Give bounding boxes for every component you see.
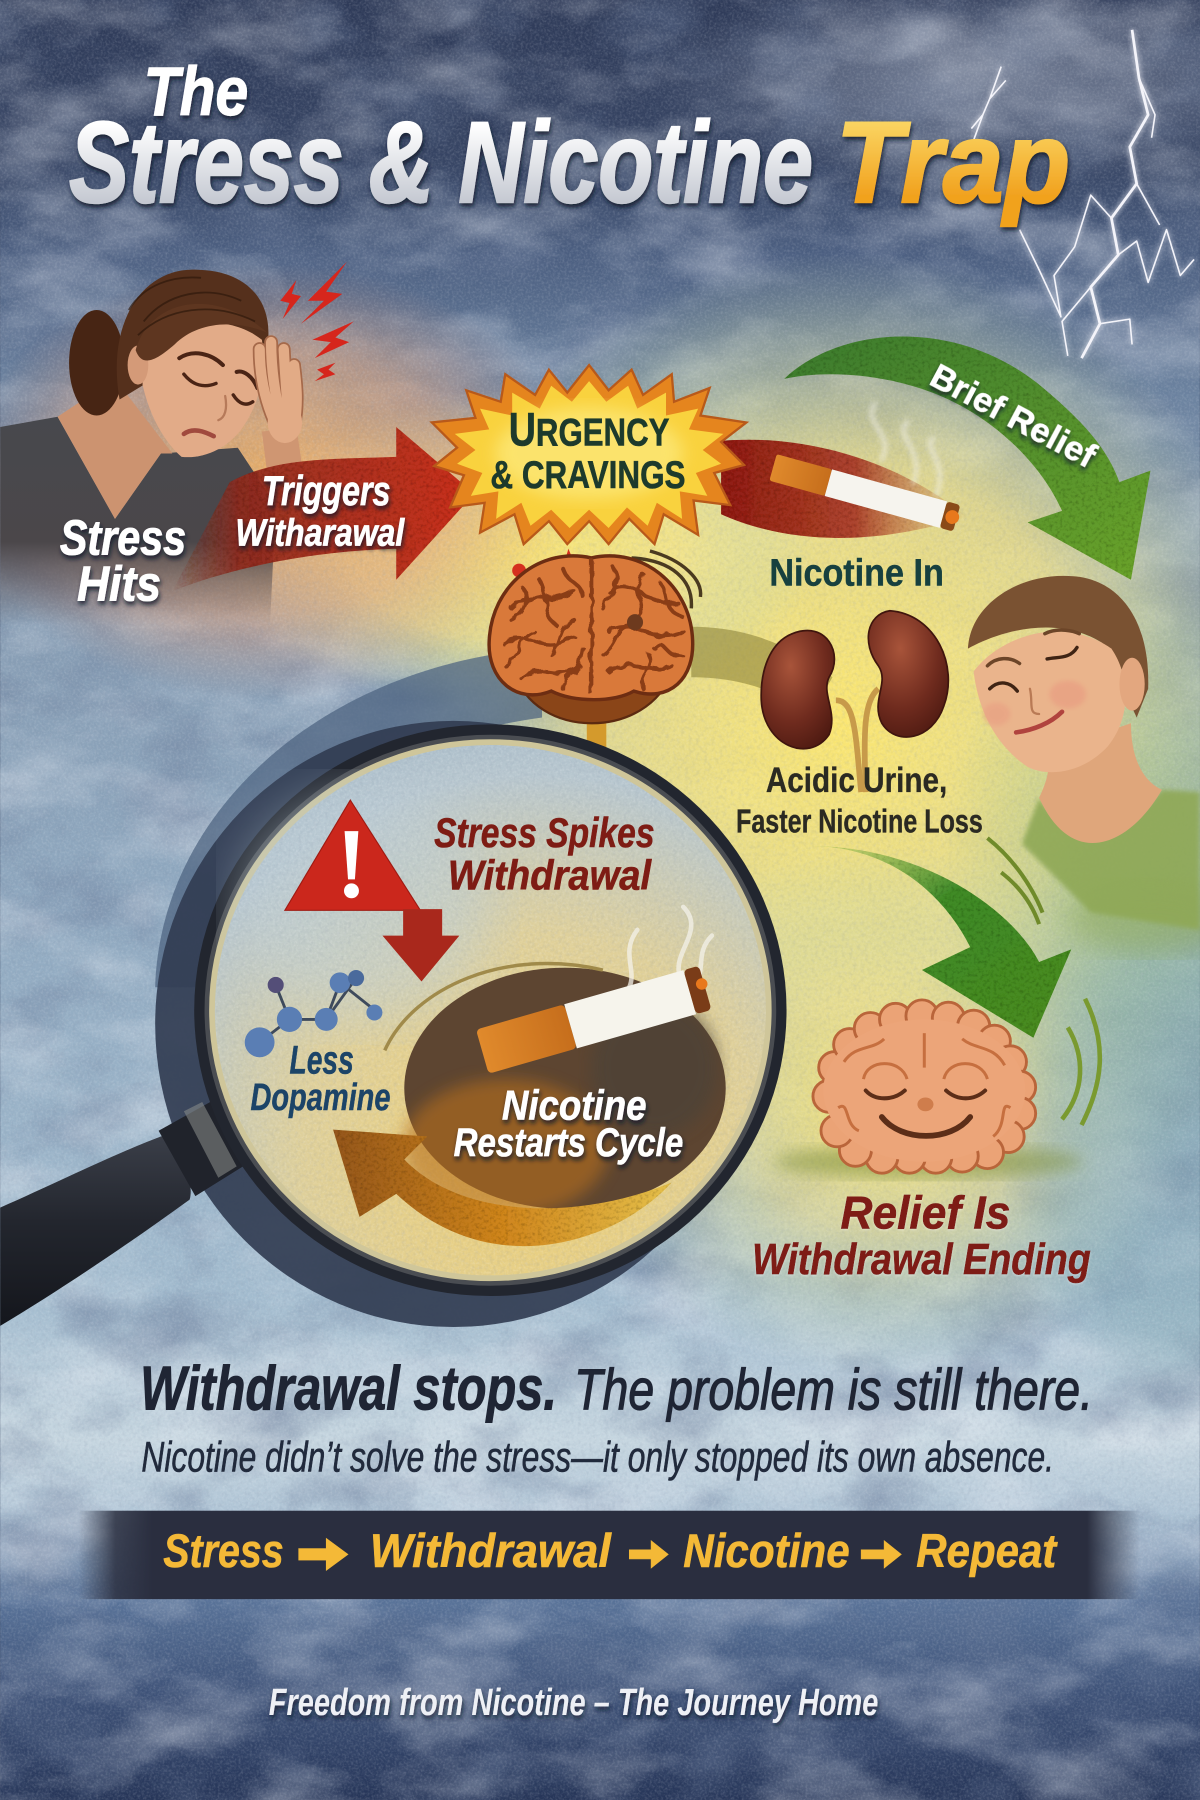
urgency text: URGENCY [509, 402, 669, 455]
face [866, 1091, 985, 1136]
cycle word: Repeat: Repeat [916, 1524, 1058, 1577]
cycle arrow 2 [629, 1541, 668, 1568]
dark spot [627, 614, 643, 630]
lens: dopamine molecule [245, 970, 382, 1057]
cerebellum [514, 672, 672, 723]
brain stem [587, 717, 606, 752]
lens: warning triangle [285, 800, 420, 910]
face [143, 323, 263, 457]
lens: nicotine restarts cycle text: Nicotine [502, 1082, 646, 1128]
label: Triggers Withdrawal [236, 468, 406, 554]
lens: less dopamine text: Dopamine [250, 1077, 390, 1119]
shirt [1022, 790, 1200, 930]
folds [838, 1033, 1010, 1136]
icon: cigarette with smoke [769, 404, 963, 532]
title line: The: The [144, 53, 248, 130]
lens: stress spikes withdrawal text: Withdrawal [448, 853, 652, 899]
lens: nicotine restarts cycle text [454, 1082, 683, 1165]
red droplets [512, 549, 576, 577]
callout: urgency and cravings starburst [432, 365, 746, 544]
cycle word: Nicotine: Nicotine [683, 1524, 850, 1577]
icon: red stress bolts [280, 262, 354, 381]
motion lines beside relaxed arrow [987, 838, 1043, 924]
footer: Freedom from Nicotine – The Journey Home [269, 1682, 878, 1724]
icon: stressed brain [489, 549, 701, 752]
lens: dark cycle circle [385, 963, 726, 1217]
lens: stress spikes withdrawal text [434, 810, 655, 899]
arrow: relief curve [804, 846, 1071, 1038]
label: Stress Hits: Hits [77, 556, 161, 611]
cycle word: Stress: Stress [163, 1524, 284, 1577]
arc: grey-blue return path behind magnifier [155, 627, 832, 987]
magnifying glass [0, 721, 787, 1327]
brain body [489, 556, 693, 700]
icon: smiling brain [773, 1000, 1083, 1178]
lens: stress spikes withdrawal text: Stress Spikes [434, 810, 655, 856]
right kidney [868, 611, 948, 737]
face [974, 632, 1126, 772]
label: relief is withdrawal ending: Withdrawal Ending [752, 1236, 1091, 1284]
arrow: triggers withdrawal [172, 427, 474, 591]
closed eyes and mouth [179, 353, 257, 436]
hair back [117, 270, 268, 399]
cycle word: Withdrawal: Withdrawal [370, 1524, 612, 1577]
ear [128, 346, 148, 385]
label: acidic urine: Faster Nicotine Loss [736, 803, 983, 840]
statement: withdrawal stops [140, 1355, 1093, 1424]
title [69, 53, 1070, 227]
label: relief is withdrawal ending: Relief Is [840, 1186, 1010, 1238]
label: Triggers Withdrawal: Triggers [262, 468, 390, 514]
lens outer ring [194, 724, 787, 1296]
lens: red down arrow [382, 909, 459, 982]
label: Stress Hits: Stress [60, 510, 186, 565]
figure: relaxed woman [968, 576, 1200, 953]
scalloped brain outline [813, 1000, 1036, 1173]
label: acidic urine: Acidic Urine, [766, 760, 947, 800]
brain folds [503, 560, 683, 693]
brain body [823, 1019, 1025, 1162]
banner: cycle [78, 1511, 1140, 1599]
statement: withdrawal stops: The problem is still there. [574, 1359, 1093, 1423]
lens interior [215, 745, 766, 1275]
lens: orange return arrow [333, 1130, 672, 1246]
cravings text: & CRAVINGS [490, 454, 686, 497]
hair strands front [136, 304, 268, 361]
lens: less dopamine text: Less [289, 1037, 354, 1082]
statement: withdrawal stops: Withdrawal stops. [140, 1355, 557, 1424]
arrow: brief relief [784, 336, 1150, 580]
lens: nicotine restarts cycle text: Restarts Cycle [454, 1120, 683, 1165]
left kidney [761, 631, 834, 749]
ponytail [69, 310, 124, 416]
handle [0, 1096, 250, 1326]
hand on temple [260, 342, 302, 443]
arrow: red swoosh to cigarette [721, 440, 967, 538]
forearm [262, 427, 308, 505]
smoke [872, 404, 940, 494]
label: Nicotine In: Nicotine In [769, 552, 944, 594]
neck and chest [58, 379, 172, 519]
figure: stressed woman [0, 270, 308, 626]
brief relief label: Brief Relief [924, 357, 1102, 476]
shirt [0, 417, 276, 626]
hair [968, 576, 1148, 717]
motion lines beside smiling brain [1062, 999, 1100, 1125]
icon: lightning bolts [971, 30, 1194, 358]
label: Stress Hits [60, 510, 186, 611]
label: Triggers Withdrawal: Witharawal [236, 512, 406, 554]
ear [1119, 658, 1145, 711]
neck [1039, 723, 1162, 843]
motion lines [632, 551, 701, 608]
cycle arrow 3 [861, 1541, 901, 1568]
ureters [836, 689, 878, 792]
face features [987, 630, 1079, 732]
ground shadow [773, 1146, 1083, 1178]
label: acidic urine [736, 760, 983, 840]
label: relief is withdrawal ending [752, 1186, 1091, 1284]
cycle arrow 1 [299, 1538, 348, 1570]
icon: kidneys [761, 611, 948, 792]
title word: Trap: Trap [836, 99, 1070, 227]
lens: less dopamine text [250, 1037, 390, 1119]
lens: cigarette [476, 907, 715, 1074]
title line: Stress & Nicotine: Stress & Nicotine [69, 99, 813, 227]
back crescent of rim [155, 721, 752, 1327]
